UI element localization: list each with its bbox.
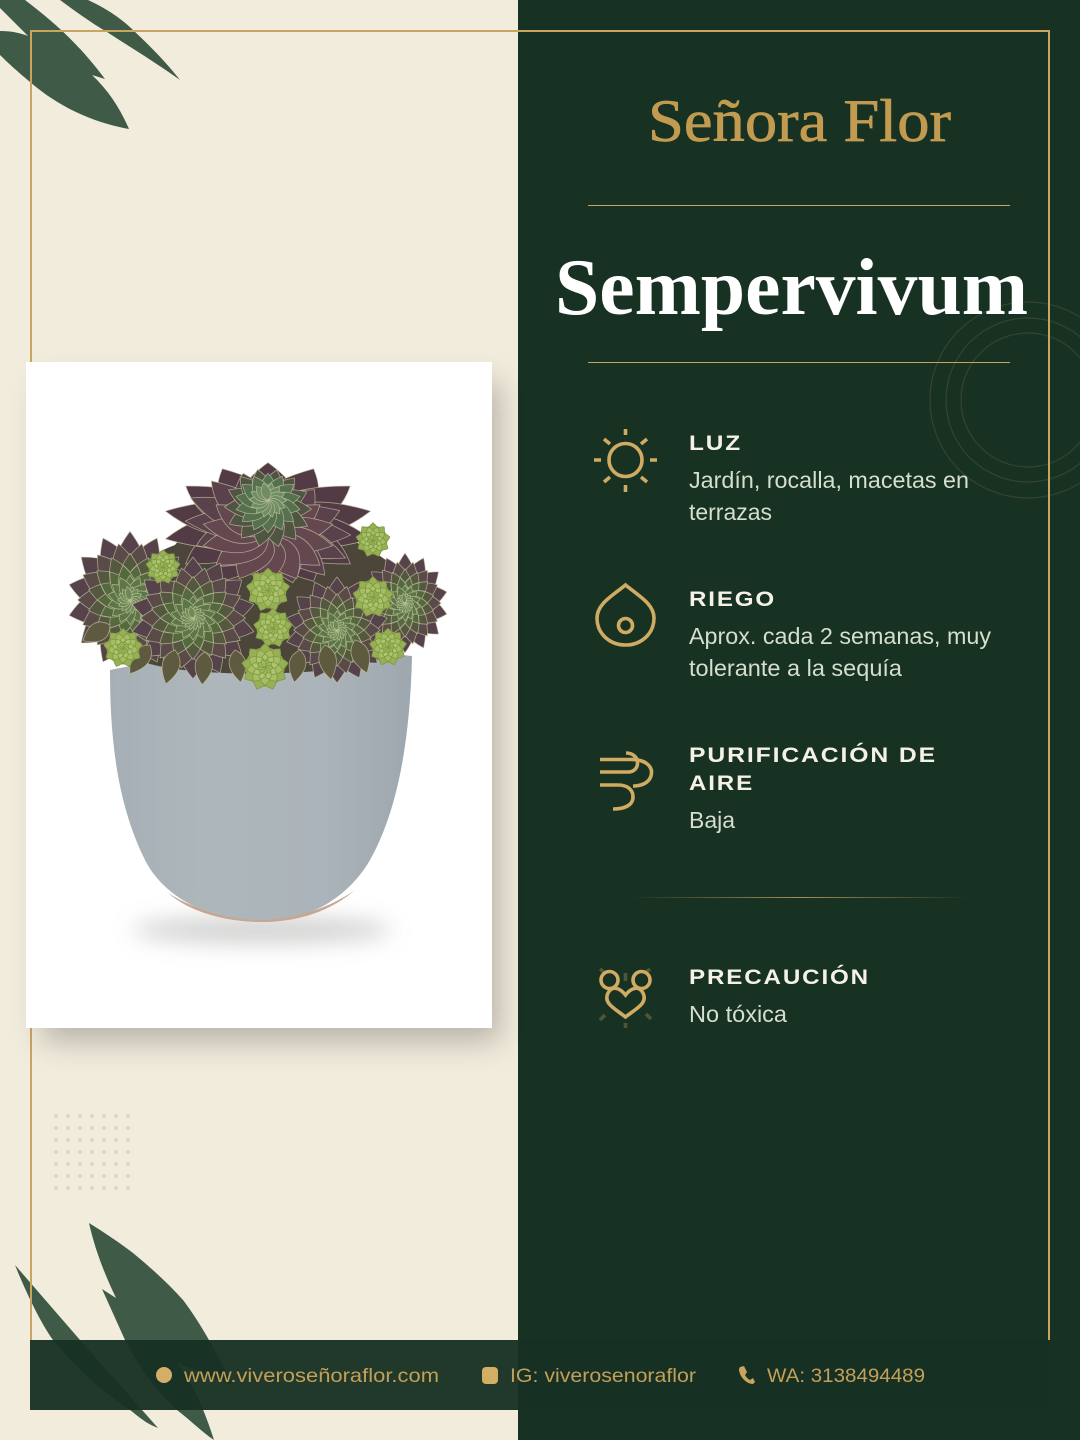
riego label: RIEGO — [689, 588, 776, 611]
website: www.viveroseñoraflor.com — [183, 1365, 439, 1387]
section: riego — [597, 585, 991, 681]
section: luz — [594, 429, 969, 525]
luz description: terrazas — [689, 499, 772, 525]
brand title: Señora Flor — [648, 88, 951, 154]
decorative concentric circles — [930, 302, 1080, 498]
succulent plant — [65, 456, 450, 691]
grey pot — [110, 640, 412, 922]
icon: heart with circles — [600, 969, 651, 1028]
lower leaves along the pot rim — [78, 617, 375, 686]
leaves: bottom left corner — [15, 1223, 232, 1440]
riego description: tolerante a la sequía — [689, 655, 902, 681]
icon: web dot — [156, 1367, 172, 1383]
section: precaución — [600, 965, 870, 1028]
precaución description: No tóxica — [689, 1001, 787, 1027]
purificación label: PURIFICACIÓN DE — [689, 743, 937, 767]
section divider — [630, 897, 970, 898]
precaución label: PRECAUCIÓN — [689, 965, 870, 989]
footer background — [30, 1340, 1050, 1410]
leaves: top left corner — [0, 0, 180, 129]
luz description: Jardín, rocalla, macetas en — [689, 467, 969, 493]
icon: instagram square — [482, 1367, 498, 1384]
whatsapp number: WA: 3138494489 — [767, 1365, 925, 1387]
white photo card — [26, 362, 492, 1028]
purificación description: Baja — [689, 807, 735, 833]
icon: sun — [594, 429, 657, 492]
side rosettes — [65, 530, 195, 670]
icon: wind — [600, 753, 652, 809]
riego description: Aprox. cada 2 semanas, muy — [689, 623, 991, 649]
section: purificación de aire — [600, 743, 937, 833]
photo card: potted sempervivum — [26, 362, 500, 1042]
large purple rosette — [159, 456, 377, 600]
purificación label: AIRE — [689, 772, 754, 795]
dark plant base — [100, 519, 425, 674]
icon: water drop — [597, 585, 654, 645]
cream background panel — [0, 0, 518, 1440]
pot ground shadow — [132, 916, 392, 944]
dark green panel — [518, 0, 1080, 1440]
plant name heading: Sempervivum — [555, 244, 1028, 332]
icon: phone — [739, 1366, 755, 1384]
rule under brand title — [588, 205, 1010, 206]
dot grid — [54, 1114, 130, 1190]
luz label: LUZ — [689, 432, 742, 455]
footer bar — [30, 1340, 1050, 1410]
rule under plant name — [588, 362, 1010, 363]
card shadow — [42, 382, 500, 1042]
pale green offsets — [355, 523, 391, 558]
instagram handle: IG: viverosenoraflor — [510, 1365, 697, 1387]
